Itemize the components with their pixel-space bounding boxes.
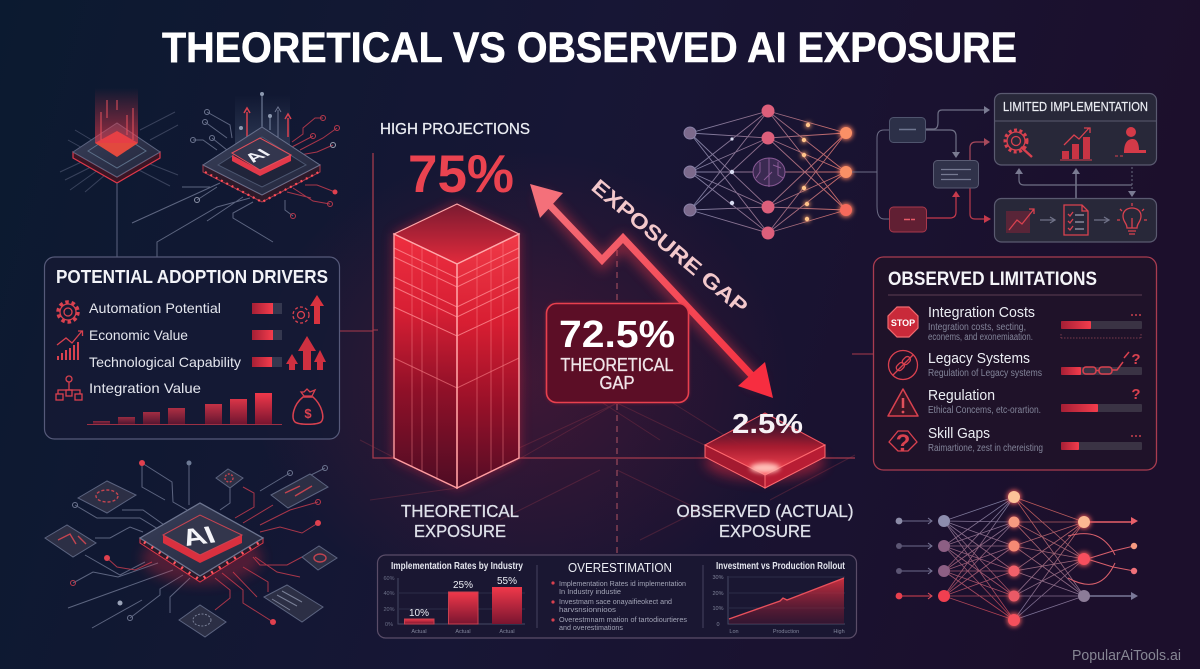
icon: question cloud [889, 430, 917, 457]
icon: gear with magnifier [1005, 130, 1032, 157]
driver labels: Economic Value [89, 327, 188, 343]
text block: overestimation: In Industry industie [559, 589, 621, 596]
icon: bar chart with trend [1060, 128, 1092, 160]
limitation: regulation [928, 386, 1142, 416]
chart: implementation rates by industry: Actual [499, 629, 515, 635]
driver labels: Integration Value [89, 380, 201, 396]
connector from drivers panel to chart axis [340, 330, 373, 332]
icon: org structure [56, 376, 82, 400]
chart: implementation rates by industry: 55% [497, 576, 517, 587]
connector from chips to drivers panel [116, 183, 118, 257]
icon: light bulb [1117, 203, 1147, 234]
limitation: regulation: Ethical Concems, etc-orartion. [928, 405, 1041, 416]
chip illustration: AI processor [132, 92, 340, 257]
text block: overestimation: OVERESTIMATION [568, 560, 672, 575]
chart: implementation rates by industry [383, 561, 525, 635]
flow diagram [890, 94, 1156, 242]
neural network: bottom [896, 490, 1138, 627]
background red glow [250, 150, 790, 610]
limitation: integration costs [928, 304, 1142, 343]
driver level bars [252, 303, 282, 367]
driver labels: Automation Potential [89, 300, 221, 316]
limitation: legacy systems: Regulation of Legacy systems [928, 368, 1042, 379]
heading: limited implementation: LIMITED IMPLEMENTATION [1003, 99, 1148, 114]
limitation: regulation: Regulation [928, 387, 995, 404]
limitation: integration costs: econems, and exonemiaation. [928, 332, 1033, 343]
chart: implementation rates by industry: Actual [411, 629, 427, 635]
flow arrows [926, 110, 1132, 219]
icon: stop sign [888, 307, 918, 337]
connector from network to flow [852, 130, 889, 219]
panel: observed limitations [874, 257, 1156, 470]
chip illustration: AI processor: AI [240, 147, 275, 165]
flow node: top [890, 118, 926, 142]
limitation: skill gaps [928, 425, 1142, 454]
driver labels: Technological Capability [89, 354, 241, 370]
text block: overestimation: and overestimations [559, 625, 623, 632]
panel: potential adoption drivers [44, 257, 340, 439]
text block: overestimation [551, 560, 688, 632]
column: theoretical exposure [394, 204, 519, 488]
chart: investment vs production rollout: 10% [712, 606, 724, 612]
limitation: legacy systems: ? [1131, 351, 1141, 368]
icon: chart thumbnail [1006, 209, 1034, 233]
icon: checklist document [1064, 205, 1088, 235]
chart: implementation rates by industry: 25% [453, 580, 473, 591]
panel: bottom statistics [378, 555, 856, 638]
chart: implementation rates by industry: 0% [385, 622, 393, 628]
chart: investment vs production rollout: Production [773, 629, 799, 635]
label: high projections: HIGH PROJECTIONS [380, 121, 530, 138]
callout: theoretical gap: THEORETICAL [560, 355, 674, 375]
icon: warning triangle [888, 389, 918, 416]
stat: 2.5 percent: 2.5% [732, 408, 803, 439]
heading: potential adoption drivers: POTENTIAL ADOPTION DRIVERS [56, 266, 328, 287]
chart: implementation rates by industry: 10% [409, 608, 429, 619]
limitation: legacy systems: Legacy Systems [928, 350, 1030, 367]
icon: brain [753, 158, 785, 187]
chip illustration: central AI hub with satellites: AI [177, 522, 220, 552]
label: observed exposure: OBSERVED (ACTUAL) [676, 501, 854, 521]
label: observed exposure: EXPOSURE [719, 521, 811, 541]
limitation: integration costs: Integration Costs [928, 304, 1035, 321]
label: theoretical exposure: EXPOSURE [414, 521, 506, 541]
text block: overestimation: Overestmnam mation of tartodiourtieres [559, 617, 688, 624]
icon: gear [58, 302, 78, 322]
title: THEORETICAL VS OBSERVED AI EXPOSURE [162, 24, 1017, 72]
platform: observed exposure [705, 413, 825, 488]
limitation: skill gaps: Raimartione, zest in chereisting [928, 443, 1043, 454]
chart: investment vs production rollout: High [833, 629, 845, 635]
chart: implementation rates by industry: Implementation Rates by Industry [391, 561, 523, 572]
icon: money bag [293, 389, 323, 424]
label: exposure gap: EXPOSURE GAP [587, 175, 752, 319]
arrow: exposure gap [530, 184, 773, 398]
chip illustration: central AI hub with satellites [45, 460, 337, 637]
icon: question cloud: ? [896, 430, 910, 457]
limitation: integration costs: Integration costs, secting, [928, 322, 1026, 333]
panel: limited implementation [994, 94, 1156, 165]
callout: theoretical gap: GAP [600, 373, 634, 393]
flow node: bottom red [890, 207, 926, 232]
icon: person at desk [1115, 127, 1146, 156]
chart: investment vs production rollout: 0 [716, 622, 720, 628]
text block: overestimation: Implementation Rates id implementation [559, 581, 686, 588]
driver labels [89, 300, 241, 396]
heading: observed limitations: OBSERVED LIMITATIONS [888, 268, 1097, 290]
chart: implementation rates by industry: 20% [383, 607, 395, 613]
label: observed exposure [676, 501, 854, 541]
text block: overestimation: Investmam sace onayaifieokect and [559, 599, 672, 606]
chart: investment vs production rollout: 20% [712, 591, 724, 597]
stat: 75 percent: 75% [408, 145, 514, 204]
icon: gear with arrow [293, 295, 324, 324]
label: theoretical exposure [401, 501, 519, 541]
chart: investment vs production rollout: Lon [729, 629, 739, 635]
flow node: middle [934, 160, 978, 188]
connector from network to observed limitations [852, 353, 873, 355]
callout: theoretical gap: 72.5% [559, 314, 675, 356]
neural network: top [684, 104, 853, 240]
chart: implementation rates by industry: Actual [455, 629, 471, 635]
panel: implementation process [994, 198, 1156, 242]
mini column chart [87, 393, 282, 424]
chart: implementation rates by industry: 60% [383, 576, 395, 582]
chart: investment vs production rollout: Investment vs Production Rollout [716, 561, 846, 572]
icon: money bag: $ [304, 406, 312, 421]
icon: broken link [888, 350, 918, 380]
chip illustration: glowing processor [60, 88, 178, 192]
text block: overestimation: harvsnsionnioos [559, 607, 617, 614]
chart: investment vs production rollout: 30% [712, 575, 724, 581]
icon: stop sign: STOP [891, 318, 915, 328]
chart: investment vs production rollout [712, 561, 846, 635]
limitation: skill gaps: Skill Gaps [928, 425, 990, 442]
icon: growth chart [57, 331, 82, 360]
icon: three arrows [286, 336, 326, 370]
limitation: regulation: ? [1131, 386, 1141, 403]
limitation: legacy systems [928, 350, 1142, 379]
label: theoretical exposure: THEORETICAL [401, 501, 519, 521]
chart axes and floor grid [360, 153, 855, 570]
watermark: PopularAiTools.ai [1072, 648, 1181, 664]
callout: theoretical gap [546, 304, 688, 402]
chart: implementation rates by industry: 40% [383, 591, 395, 597]
